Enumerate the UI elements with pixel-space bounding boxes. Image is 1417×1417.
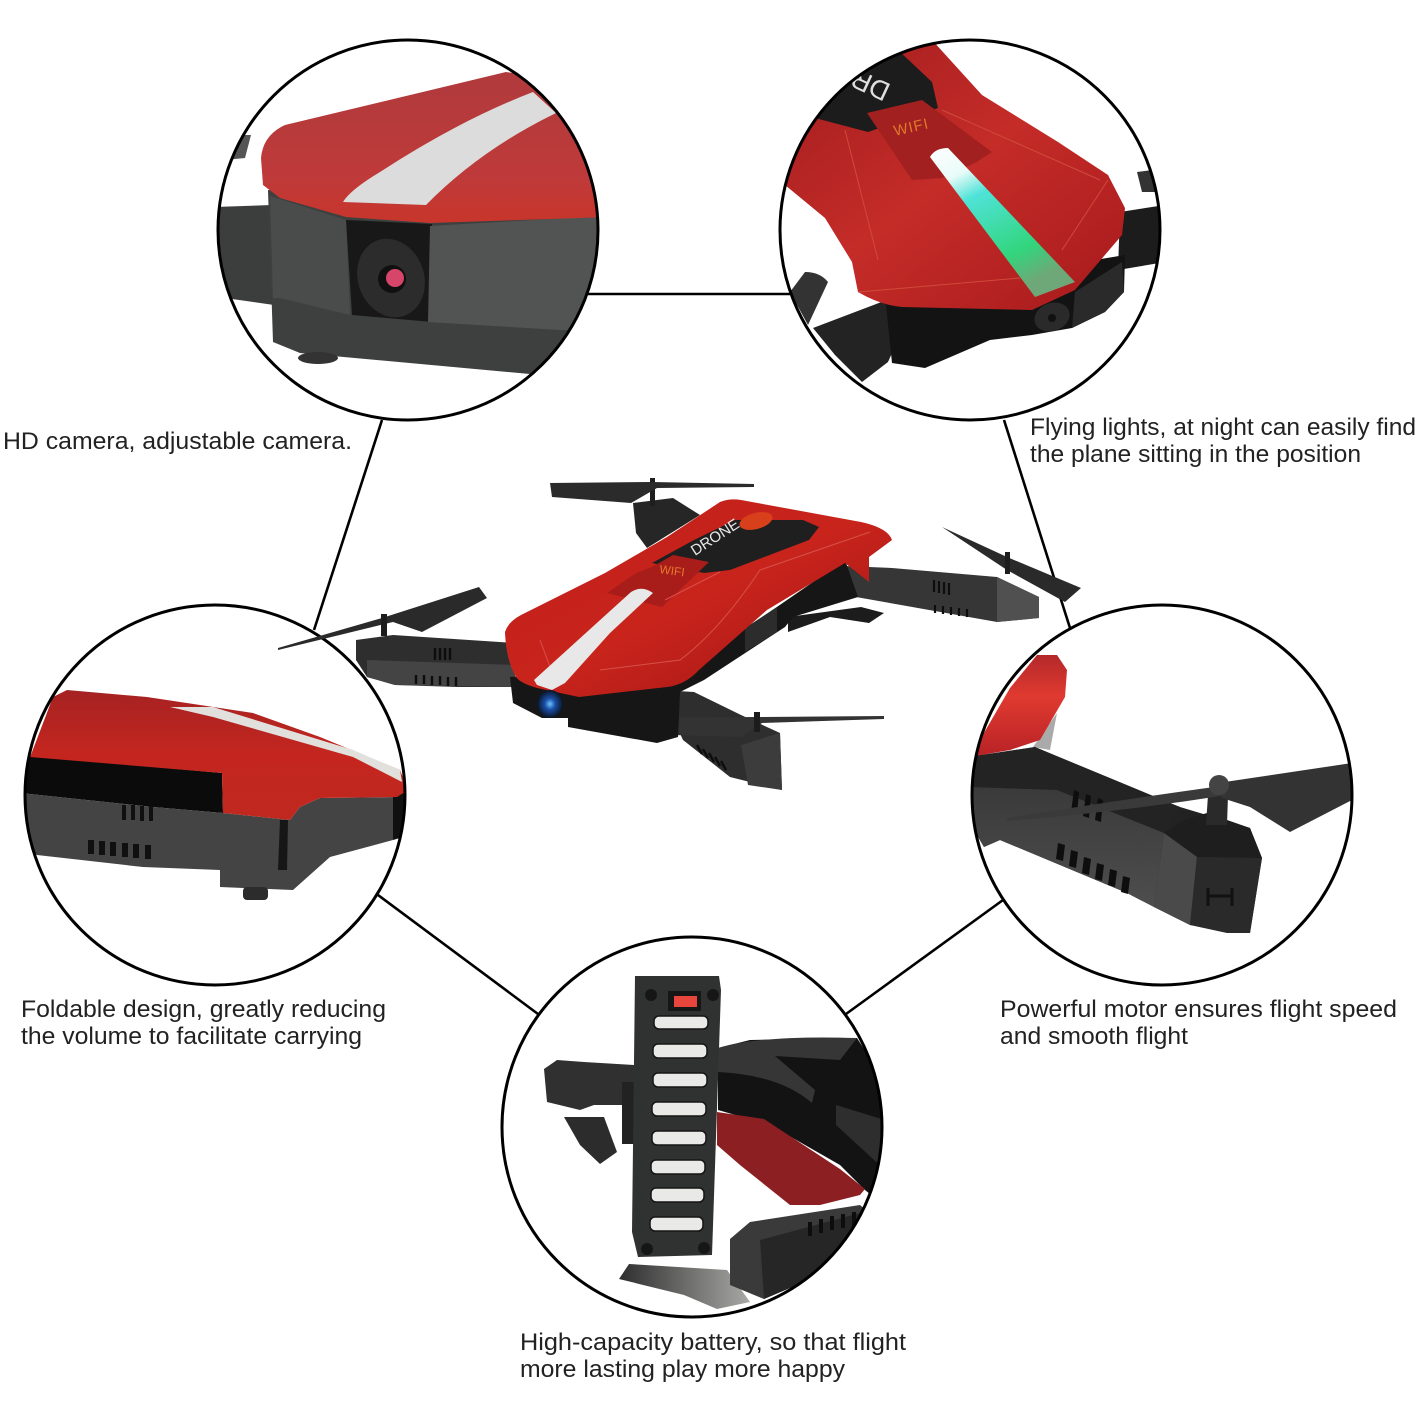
panel: foldable design close-up [20, 605, 410, 985]
connector lines [314, 294, 1070, 1014]
rear left arm and propeller [550, 478, 754, 548]
wifi label: WIFI [659, 562, 686, 579]
panel: battery close-up [502, 937, 890, 1317]
red body [505, 499, 892, 697]
underside [510, 560, 858, 743]
text: battery caption: High-capacity battery, so that flight [520, 1329, 906, 1356]
panel: flying light close-up: DRC [829, 55, 895, 107]
panel: camera close-up [214, 40, 610, 420]
text: battery caption: more lasting play more happy [520, 1356, 845, 1383]
side grille [745, 607, 777, 652]
front left arm and propeller [278, 587, 515, 687]
text: foldable caption: the volume to facilitate carrying [21, 1023, 362, 1050]
text: lights caption: Flying lights, at night can easily find [1030, 414, 1416, 441]
text: camera caption: HD camera, adjustable camera. [3, 428, 352, 455]
drone main image [278, 478, 1081, 790]
front right arm and propeller [636, 690, 884, 790]
front camera [537, 690, 563, 718]
panel: flying light close-up [778, 40, 1165, 420]
text: lights caption: the plane sitting in the position [1030, 441, 1361, 468]
body panel lines [540, 532, 870, 680]
panel: flying light close-up: WIFI [892, 115, 931, 140]
white led [534, 589, 653, 690]
text: motor caption: and smooth flight [1000, 1023, 1188, 1050]
drone label: DRONE [688, 516, 743, 559]
black top panel [652, 520, 819, 573]
logo [738, 509, 774, 533]
panel: motor close-up [968, 605, 1352, 985]
rear right arm and propeller [788, 527, 1081, 632]
wifi plate [607, 555, 709, 607]
text: motor caption: Powerful motor ensures flight speed [1000, 996, 1397, 1023]
text: foldable caption: Foldable design, greatly reducing [21, 996, 386, 1023]
